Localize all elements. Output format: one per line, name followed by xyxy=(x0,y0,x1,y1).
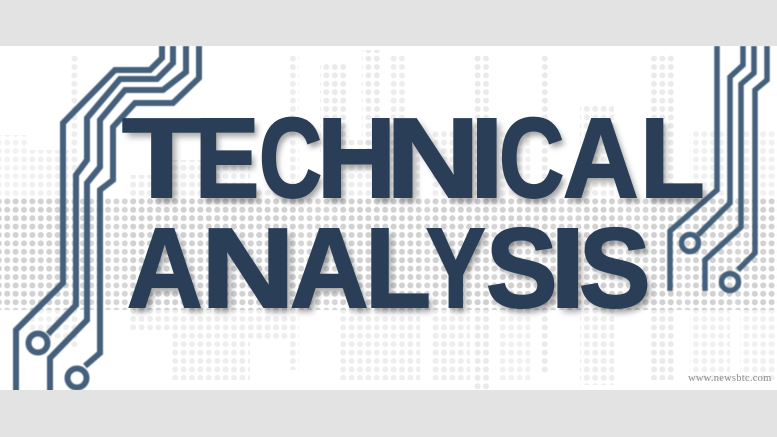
title line 2 xyxy=(127,205,654,331)
trace 1 right xyxy=(670,46,717,291)
title line 2: L xyxy=(365,205,431,331)
bottom grey bar xyxy=(0,390,777,437)
top grey bar xyxy=(0,0,777,46)
title line 1 xyxy=(122,95,709,221)
title line 2: A xyxy=(127,205,202,331)
title line 2: I xyxy=(550,205,585,331)
trace 1 left xyxy=(16,46,162,392)
trace 3 right xyxy=(705,46,754,291)
title line 2: N xyxy=(201,205,295,331)
title line 1: C xyxy=(259,95,322,221)
trace 4 left with ring xyxy=(85,46,199,366)
title line 1: I xyxy=(470,95,504,221)
title line 1: A xyxy=(563,95,638,221)
watermark: www.newsbtc.com xyxy=(688,373,772,384)
ring terminal 2 xyxy=(28,334,48,352)
trace 3 left xyxy=(50,46,186,392)
title line 1: H xyxy=(317,95,396,221)
ring terminal 4 right xyxy=(722,274,738,290)
title line 2: S xyxy=(486,205,557,331)
title line 1: L xyxy=(640,95,705,221)
title line 1: E xyxy=(195,95,259,221)
dot matrix background xyxy=(0,50,777,390)
title line 1: N xyxy=(386,95,480,221)
trace 4 right with ring xyxy=(738,46,767,270)
right circuit traces xyxy=(670,46,767,291)
ring terminal 4 xyxy=(68,368,86,388)
title line 2: S xyxy=(579,205,650,331)
title line 1: T xyxy=(122,95,202,221)
trace 2 right with ring xyxy=(698,46,743,235)
trace 2 left with ring xyxy=(48,46,173,334)
title line 2: Y xyxy=(426,205,485,331)
title line 2: A xyxy=(290,205,368,331)
background dot matrix and circuit traces xyxy=(0,46,777,390)
title line 1: C xyxy=(499,95,564,221)
left circuit traces xyxy=(16,46,199,392)
ring terminal 2 right xyxy=(682,234,698,252)
